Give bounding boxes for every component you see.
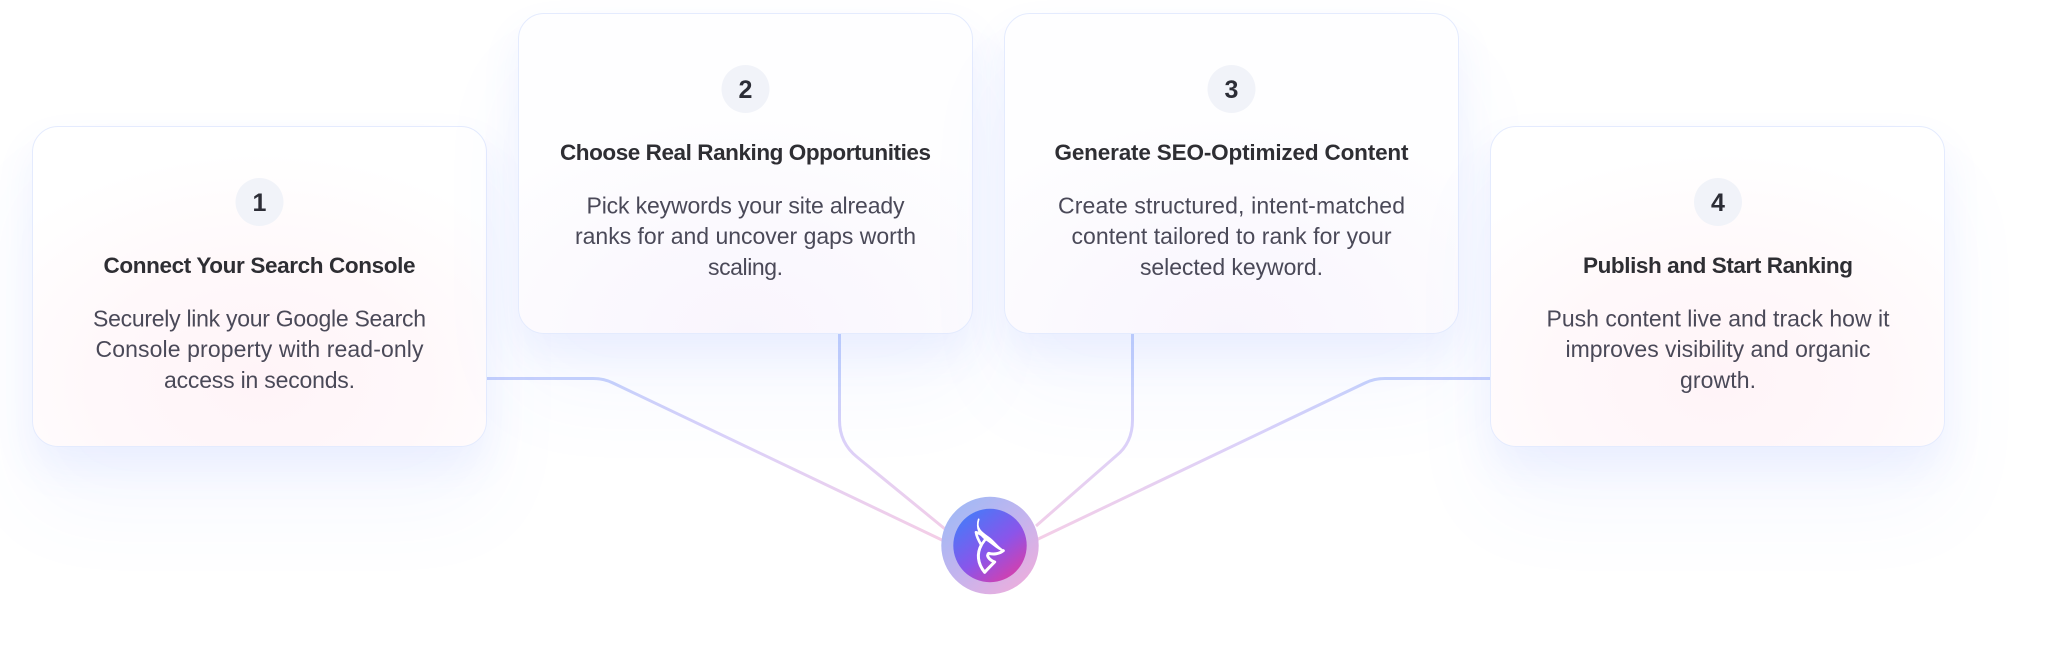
panel: step 4 xyxy=(1490,126,1945,447)
panel: step 2 xyxy=(518,12,973,334)
description: step 1: access in seconds. xyxy=(164,367,355,393)
description: step 4: growth. xyxy=(1680,367,1756,393)
step number badge 3 xyxy=(1208,64,1256,112)
step number badge 1: 1 xyxy=(253,189,267,217)
heading: step 4: Publish and Start Ranking xyxy=(1583,253,1853,278)
description: step 3: content tailored to rank for your xyxy=(1072,222,1392,248)
description: step 4: Push content live and track how it xyxy=(1546,306,1890,332)
step number badge 2: 2 xyxy=(739,76,752,104)
description: step 2: ranks for and uncover gaps worth xyxy=(575,222,916,248)
step number badge 4 xyxy=(1694,178,1742,226)
description: step 1: Console property with read-only xyxy=(96,336,424,362)
heading: step 1: Connect Your Search Console xyxy=(104,253,416,278)
icon: stylised antelope head xyxy=(976,519,1003,572)
description: step 1: Securely link your Google Search xyxy=(93,306,426,332)
step number badge 3: 3 xyxy=(1225,76,1238,104)
step number badge 2 xyxy=(722,64,770,112)
description: step 2 xyxy=(575,192,916,280)
description: step 4: improves visibility and organic xyxy=(1566,336,1870,362)
description: step 2: Pick keywords your site already xyxy=(586,192,905,218)
description: step 3: selected keyword. xyxy=(1140,254,1323,280)
description: step 1 xyxy=(93,306,426,393)
panel: step 1 xyxy=(32,126,487,447)
heading: step 2: Choose Real Ranking Opportunities xyxy=(560,140,931,164)
description: step 3: Create structured, intent-matched xyxy=(1058,192,1405,218)
description: step 3 xyxy=(1058,192,1405,280)
description: step 4 xyxy=(1546,306,1890,393)
panel: step 3 xyxy=(1004,12,1459,334)
step number badge 1 xyxy=(236,178,284,226)
heading: step 3: Generate SEO-Optimized Content xyxy=(1054,140,1409,164)
description: step 2: scaling. xyxy=(708,254,783,280)
step number badge 4: 4 xyxy=(1711,189,1725,217)
